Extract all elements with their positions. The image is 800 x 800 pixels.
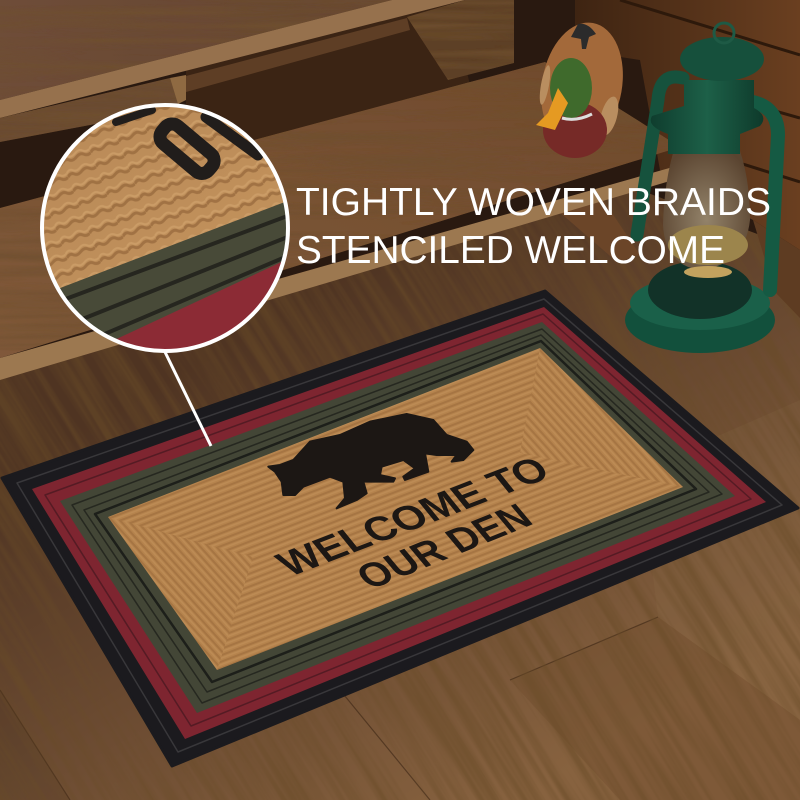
caption (296, 181, 771, 272)
magnified red band (116, 262, 281, 349)
rug stencil: bear silhouette (268, 414, 473, 508)
lower bench (0, 62, 680, 380)
caption line 1: TIGHTLY WOVEN BRAIDS (296, 181, 771, 224)
callout ring (42, 105, 288, 351)
rug: braided border and centre (2, 291, 798, 766)
tan braid texture along long sides (108, 348, 540, 557)
rug red band (32, 307, 766, 739)
background: dark recess and wall planks (0, 0, 800, 360)
rug tan centre (108, 348, 683, 670)
caption line 2: STENCILED WELCOME (296, 229, 725, 272)
rug stencil: our den: OUR DEN (348, 497, 541, 597)
magnified black stencil marks (156, 120, 218, 177)
icon: green lantern (625, 23, 778, 353)
icon: mallard duck decoy (532, 16, 632, 158)
callout: magnified braid detail (40, 100, 290, 446)
magnified green band (55, 200, 290, 345)
tan braid texture along short sides (108, 517, 253, 670)
callout pointer line (165, 352, 211, 446)
rug outer black band (2, 291, 798, 766)
upper bench (0, 0, 514, 142)
rug stencil: welcome to: WELCOME TO (269, 450, 558, 584)
magnified detail contents (44, 107, 286, 349)
rug green band (60, 322, 735, 713)
